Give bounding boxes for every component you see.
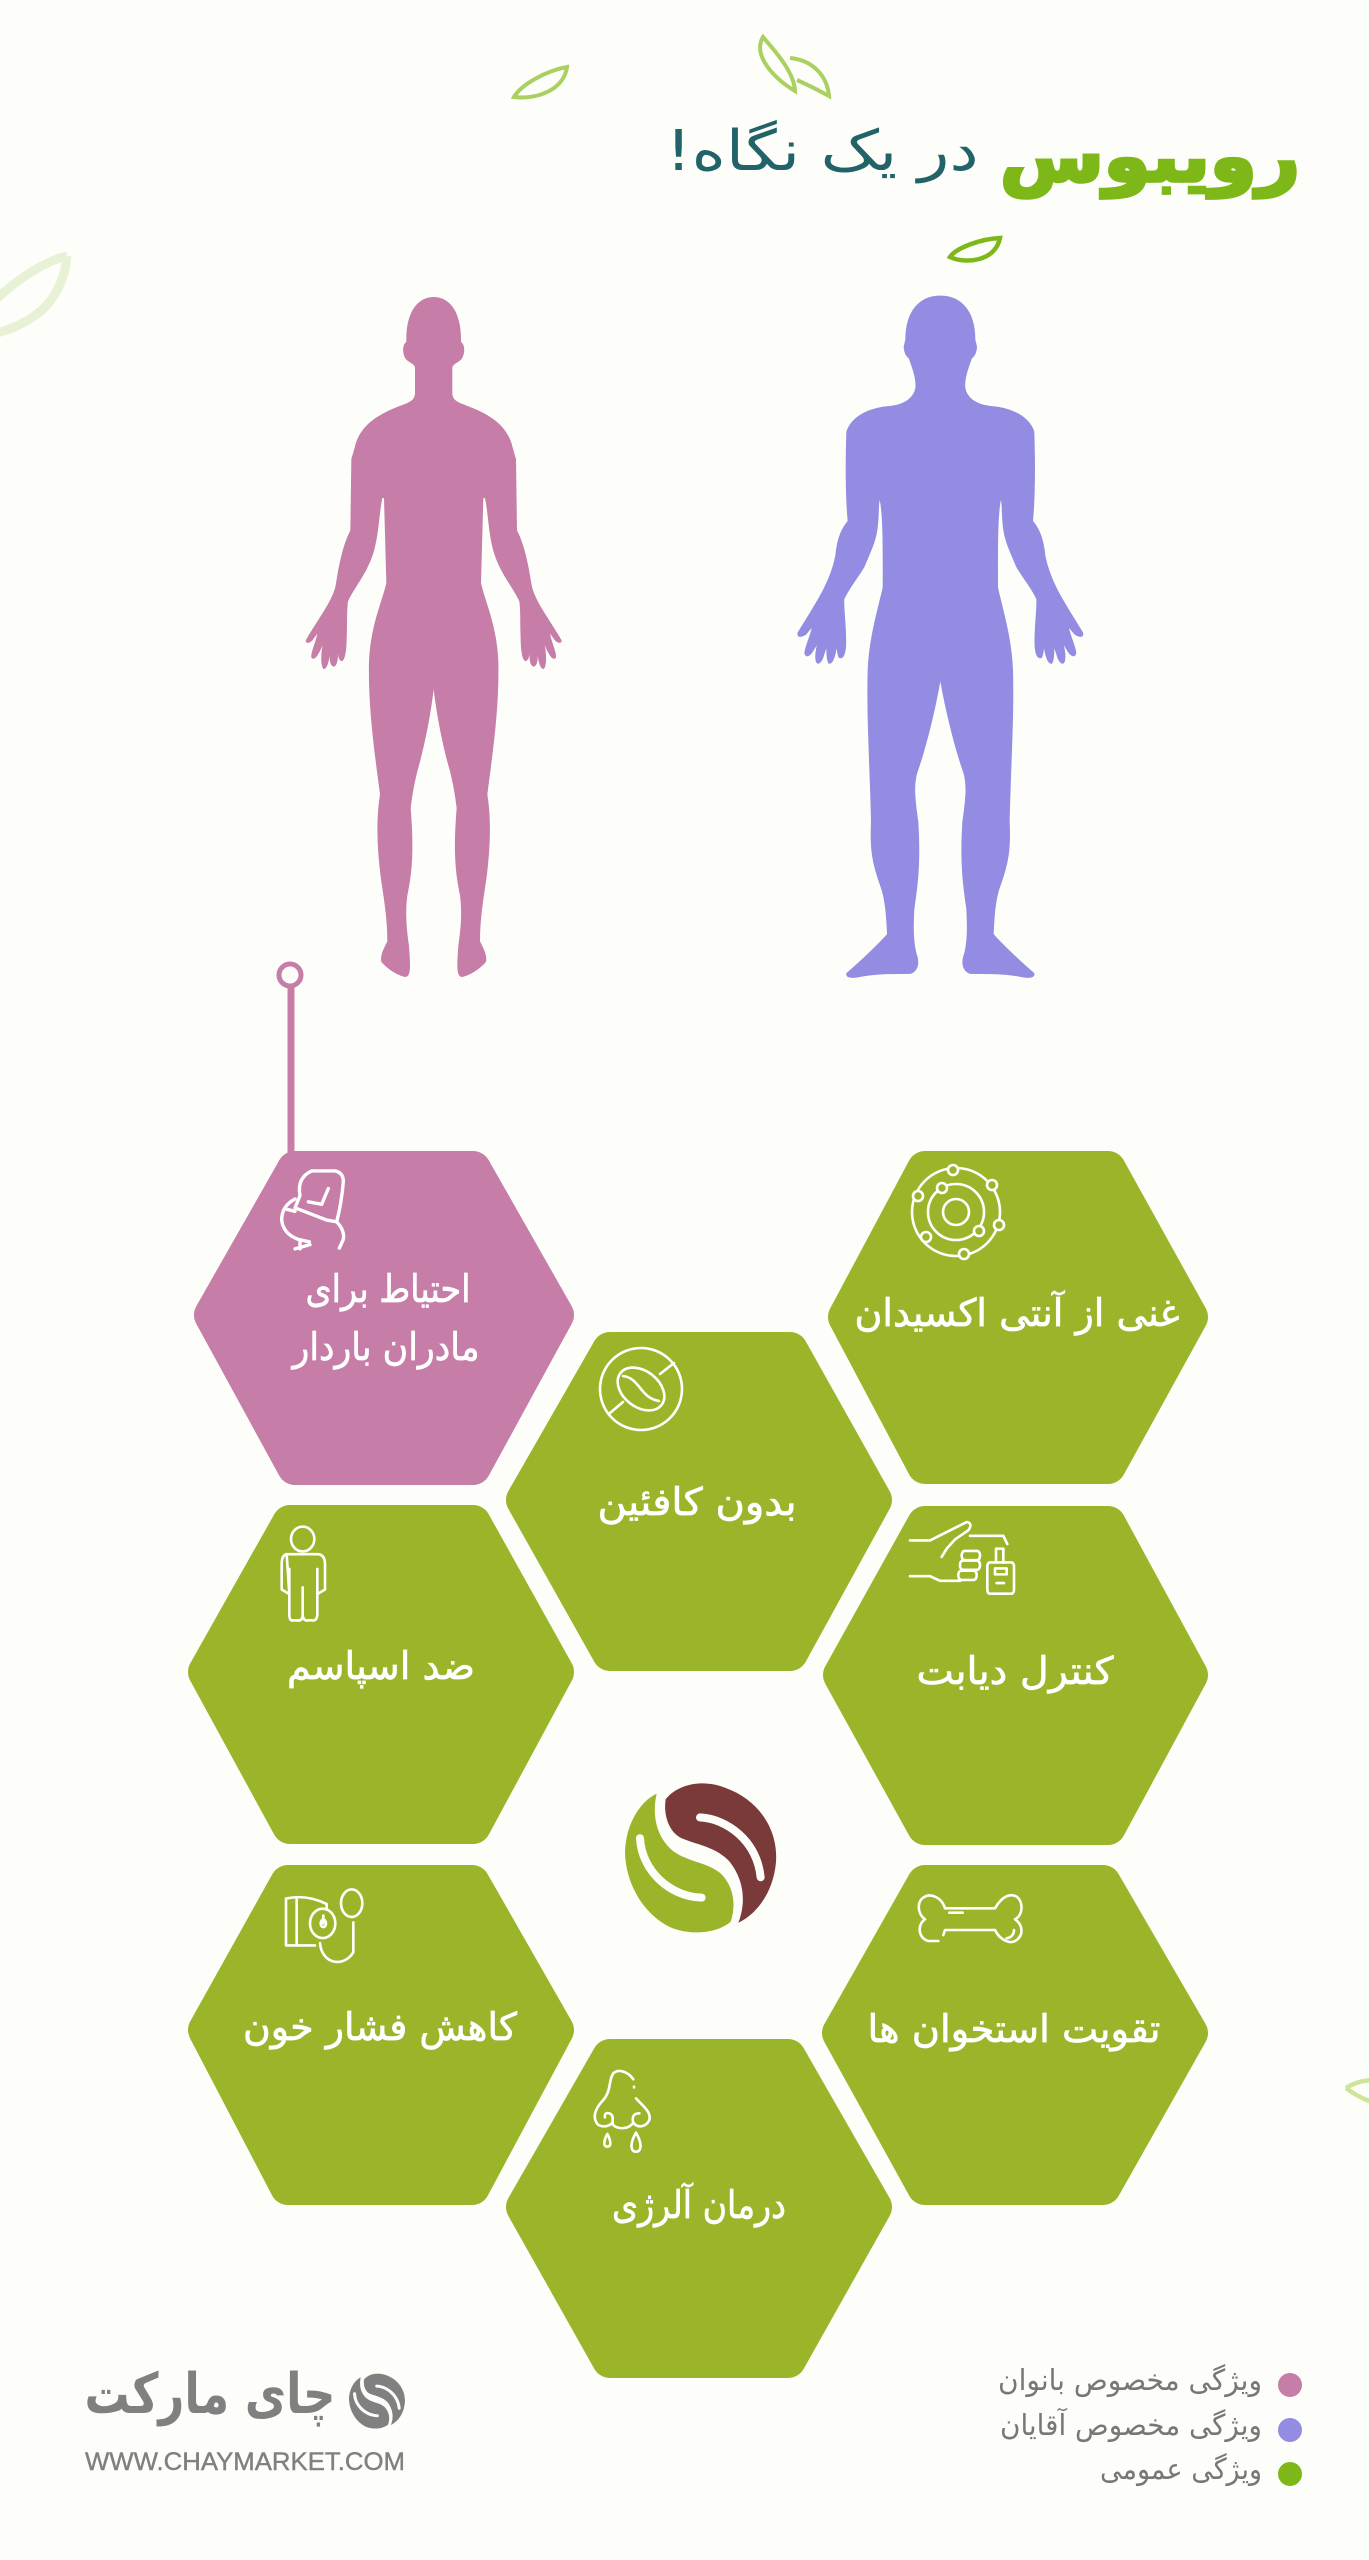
icon: runny nose [595, 2071, 650, 2152]
title: در یک نگاه! [666, 119, 978, 184]
text: pregnancy caution: مادران باردار [291, 1325, 480, 1369]
male body silhouette [798, 296, 1083, 977]
text: pregnancy caution [291, 1267, 480, 1369]
legend item: general: ویژگی عمومی [1100, 2452, 1262, 2486]
icon: gray brand mark [349, 2374, 405, 2429]
title: رویبوس [1000, 116, 1300, 198]
text: antispasm: ضد اسپاسم [287, 1644, 475, 1688]
icon: pregnant woman [282, 1171, 344, 1249]
icon: blood pressure cuff [286, 1889, 362, 1962]
legend item: women: ویژگی مخصوص بانوان [998, 2363, 1262, 2397]
panel: caffeine free hexagon [524, 1348, 874, 1653]
panel: antispasm hexagon [206, 1523, 556, 1826]
panel: diabetes control hexagon [841, 1522, 1190, 1827]
panel: antioxidant hexagon [846, 1165, 1190, 1466]
icon: atom [912, 1165, 1004, 1259]
panel: stronger bones hexagon [840, 1883, 1190, 2187]
text: caffeine free: بدون کافئین [598, 1480, 796, 1525]
footer brand logo [84, 2362, 405, 2476]
text: allergy treatment: درمان آلرژی [612, 2182, 786, 2228]
connector line from pregnancy hexagon [279, 964, 301, 1160]
panel: pregnancy caution hexagon [212, 1169, 556, 1467]
legend item: men: ویژگی مخصوص آقایان [1000, 2407, 1262, 2442]
text: lower blood pressure: کاهش فشار خون [243, 2005, 518, 2050]
legend [998, 2363, 1302, 2486]
icon: bone [919, 1895, 1021, 1942]
text: antioxidant: غنی از آنتی اکسیدان [854, 1290, 1180, 1335]
female body silhouette [306, 297, 562, 977]
text: diabetes control: کنترل دیابت [916, 1649, 1114, 1694]
title [666, 116, 1300, 198]
panel: allergy treatment hexagon [524, 2057, 874, 2360]
text: website: WWW.CHAYMARKET.COM [85, 2448, 405, 2476]
icon: crossed coffee bean [600, 1348, 682, 1430]
text: brand name: چای مارکت [84, 2362, 336, 2427]
center logo: coffee bean [625, 1783, 776, 1932]
panel: lower blood pressure hexagon [206, 1883, 556, 2187]
text: stronger bones: تقویت استخوان ها [868, 2007, 1160, 2052]
icon: standing person [282, 1527, 325, 1621]
text: pregnancy caution: احتیاط برای [306, 1267, 470, 1312]
icon: hand and glucose meter [910, 1522, 1014, 1594]
